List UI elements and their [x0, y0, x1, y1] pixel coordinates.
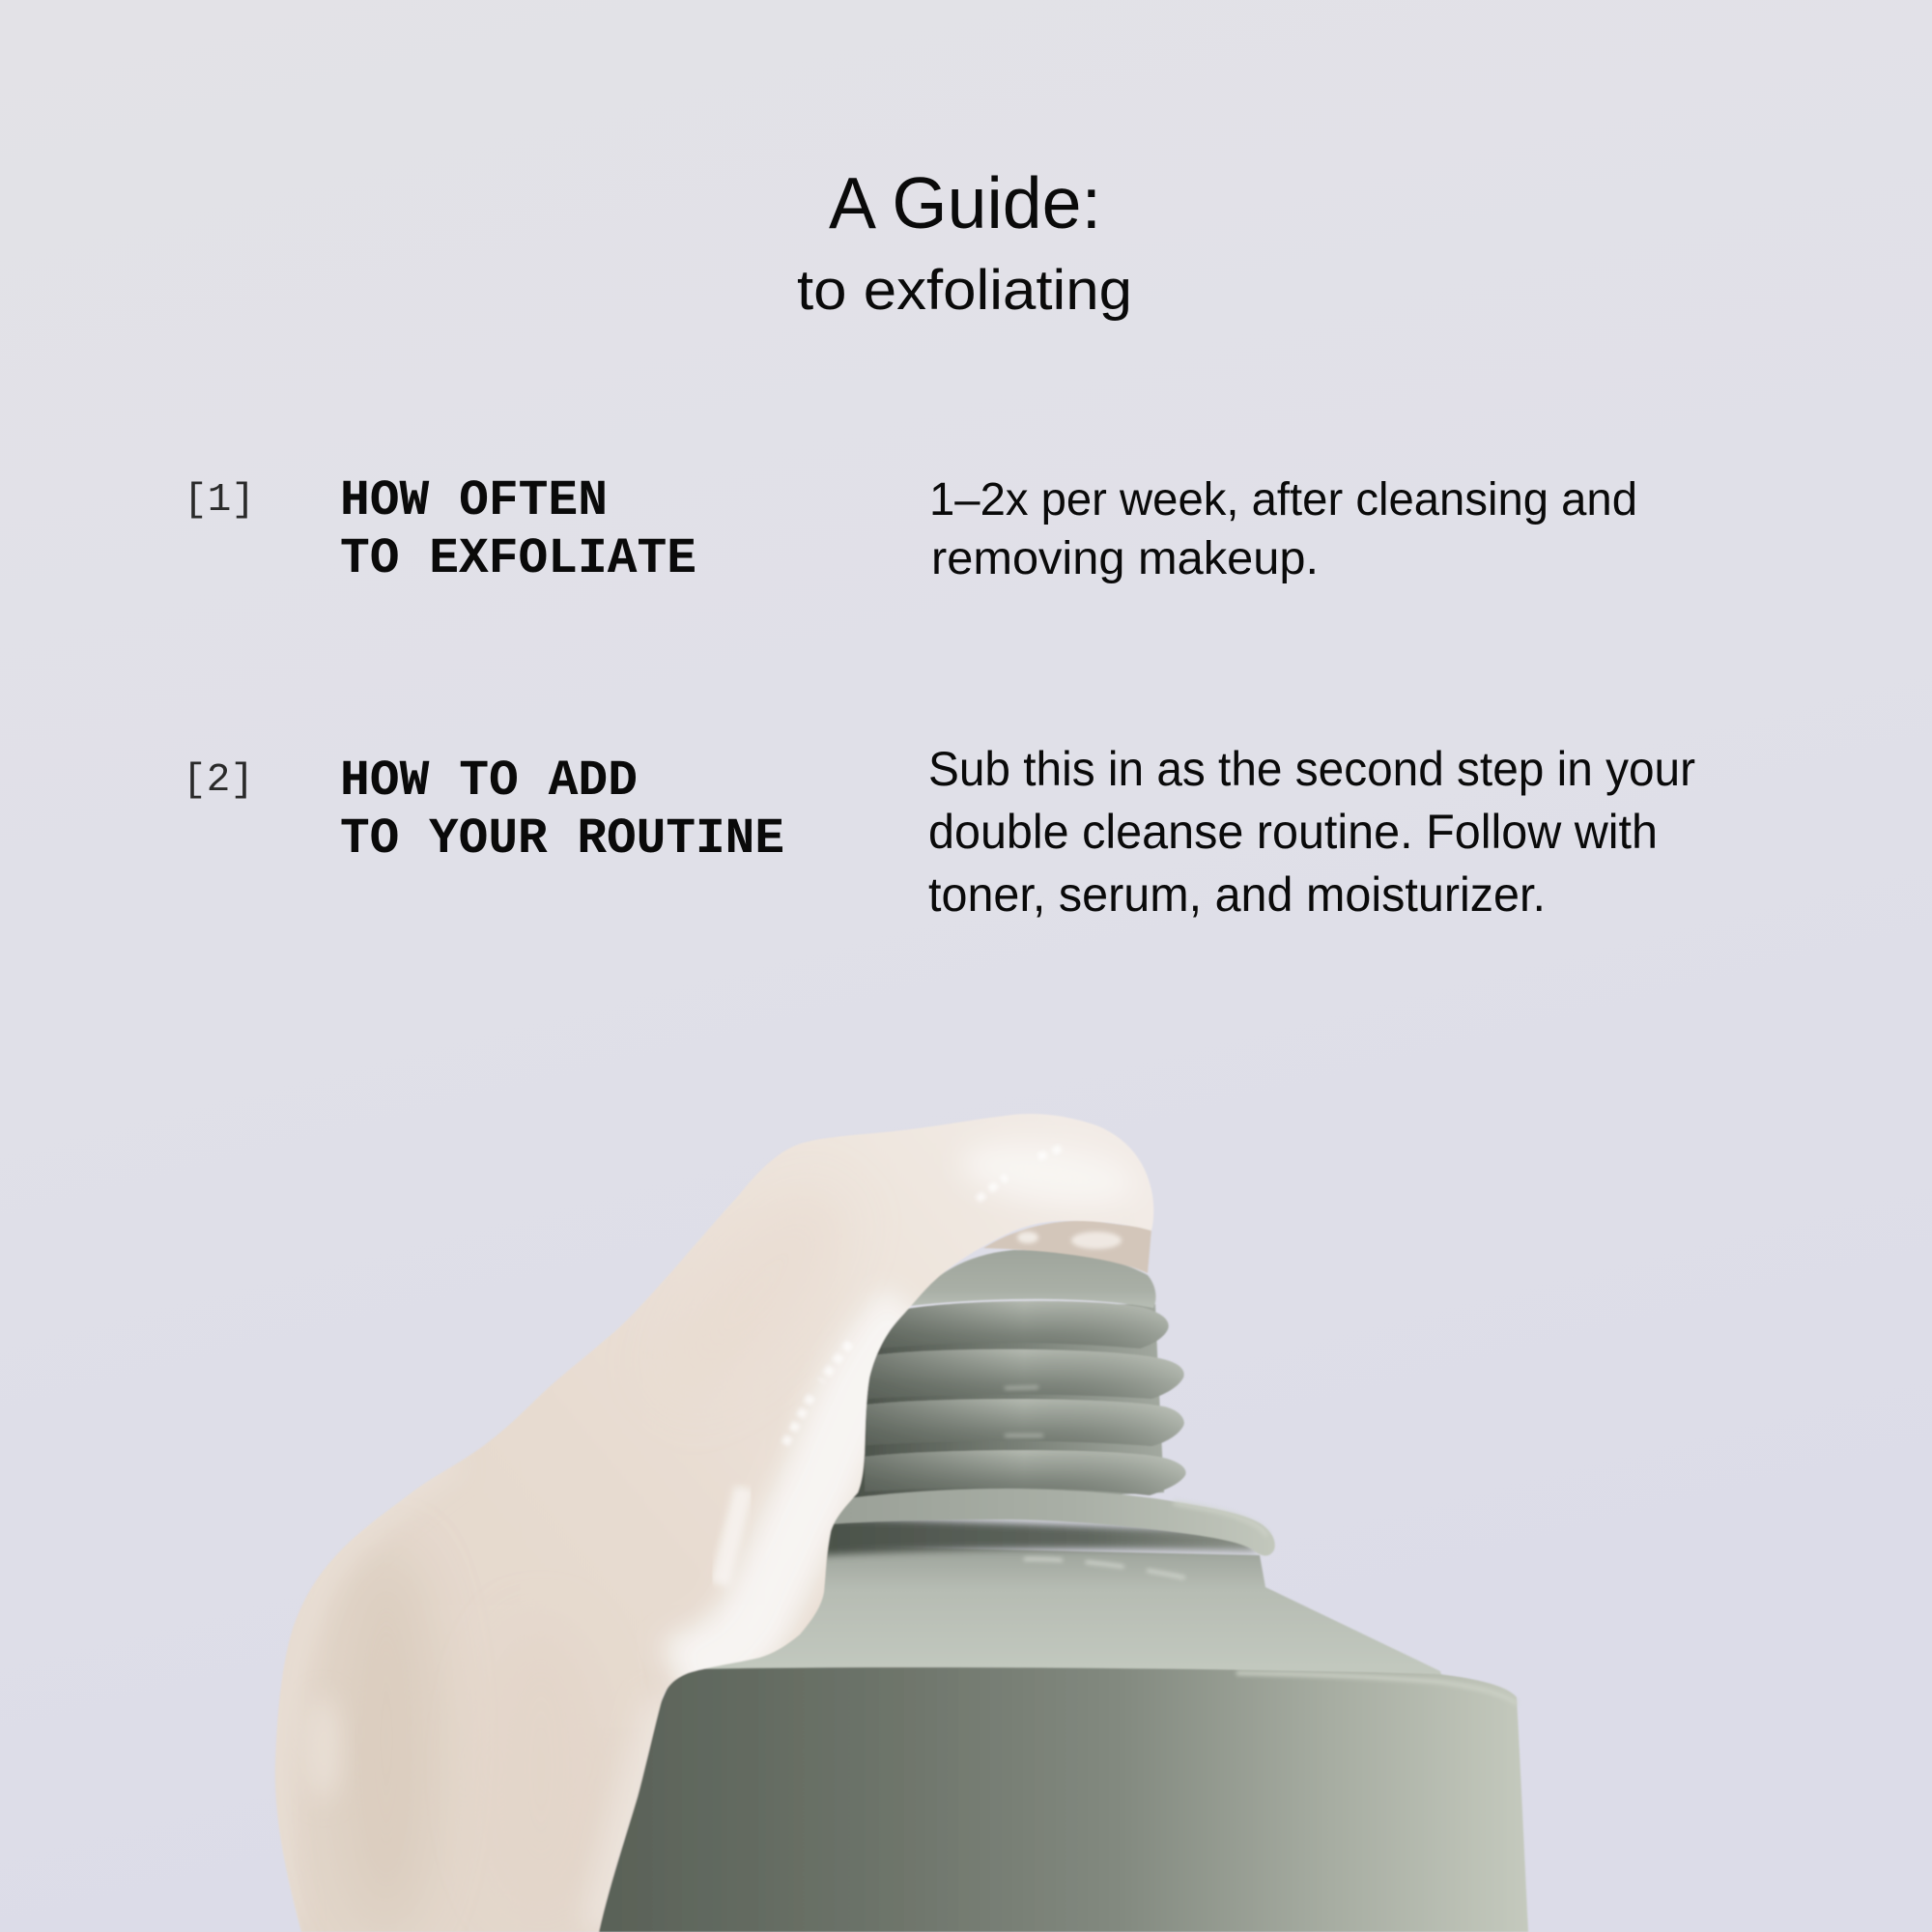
tube body	[580, 1667, 1528, 1932]
clear nozzle ring	[983, 1221, 1151, 1273]
thread 2	[877, 1301, 1169, 1349]
infographic canvas	[190, 176, 1694, 1932]
section 2: how to add	[183, 742, 1695, 922]
section 2 body line 1: Sub this in as the second step in your	[928, 742, 1695, 796]
section 2 body line 2: double cleanse routine. Follow with	[928, 805, 1658, 859]
neck highlights	[1024, 1559, 1196, 1580]
thread 3	[867, 1350, 1184, 1399]
number 2: [2]	[183, 758, 254, 803]
cream shading	[344, 1571, 433, 1899]
tube shoulder	[667, 1546, 1449, 1700]
screw threads	[860, 1250, 1193, 1502]
title	[797, 162, 1132, 322]
subheading: to exfoliating: to exfoliating	[797, 259, 1132, 322]
cream squeeze	[275, 1114, 1153, 1932]
section 1 body line 1: 1–2x per week, after cleansing and	[929, 474, 1637, 526]
thread 5	[865, 1450, 1186, 1495]
flange ring	[827, 1489, 1275, 1555]
dark band below flange	[821, 1517, 1260, 1555]
thread 1	[908, 1250, 1155, 1308]
lower edge glow	[599, 1700, 667, 1932]
section 1 body line 2: removing makeup.	[931, 533, 1319, 584]
cream tip glow	[970, 1145, 1115, 1202]
section 1 heading: HOW OFTEN	[340, 472, 608, 529]
thread core	[850, 1304, 1164, 1507]
heading: A Guide: A Guide:	[829, 162, 1101, 243]
section 1 heading line 2: TO EXFOLIATE	[340, 530, 696, 587]
cream lit edge	[676, 1314, 913, 1676]
section 2 heading: HOW TO ADD	[340, 753, 638, 810]
thread 4	[867, 1399, 1184, 1446]
left fold highlight	[310, 1708, 340, 1786]
section 1: how often	[184, 472, 1637, 587]
illustration: tube with cream	[275, 1114, 1528, 1932]
speculars	[978, 1148, 1063, 1200]
section 2 heading line 2: TO YOUR ROUTINE	[340, 810, 784, 867]
number 1: [1]	[184, 478, 255, 523]
nozzle glints	[1017, 1232, 1038, 1243]
section 2 body line 3: toner, serum, and moisturizer.	[928, 867, 1546, 922]
cream left edge glow	[277, 1540, 354, 1858]
tube body rim	[1236, 1673, 1517, 1704]
thread glints	[1005, 1387, 1043, 1435]
neck notch	[1227, 1548, 1231, 1567]
thread shading	[860, 1294, 1193, 1502]
